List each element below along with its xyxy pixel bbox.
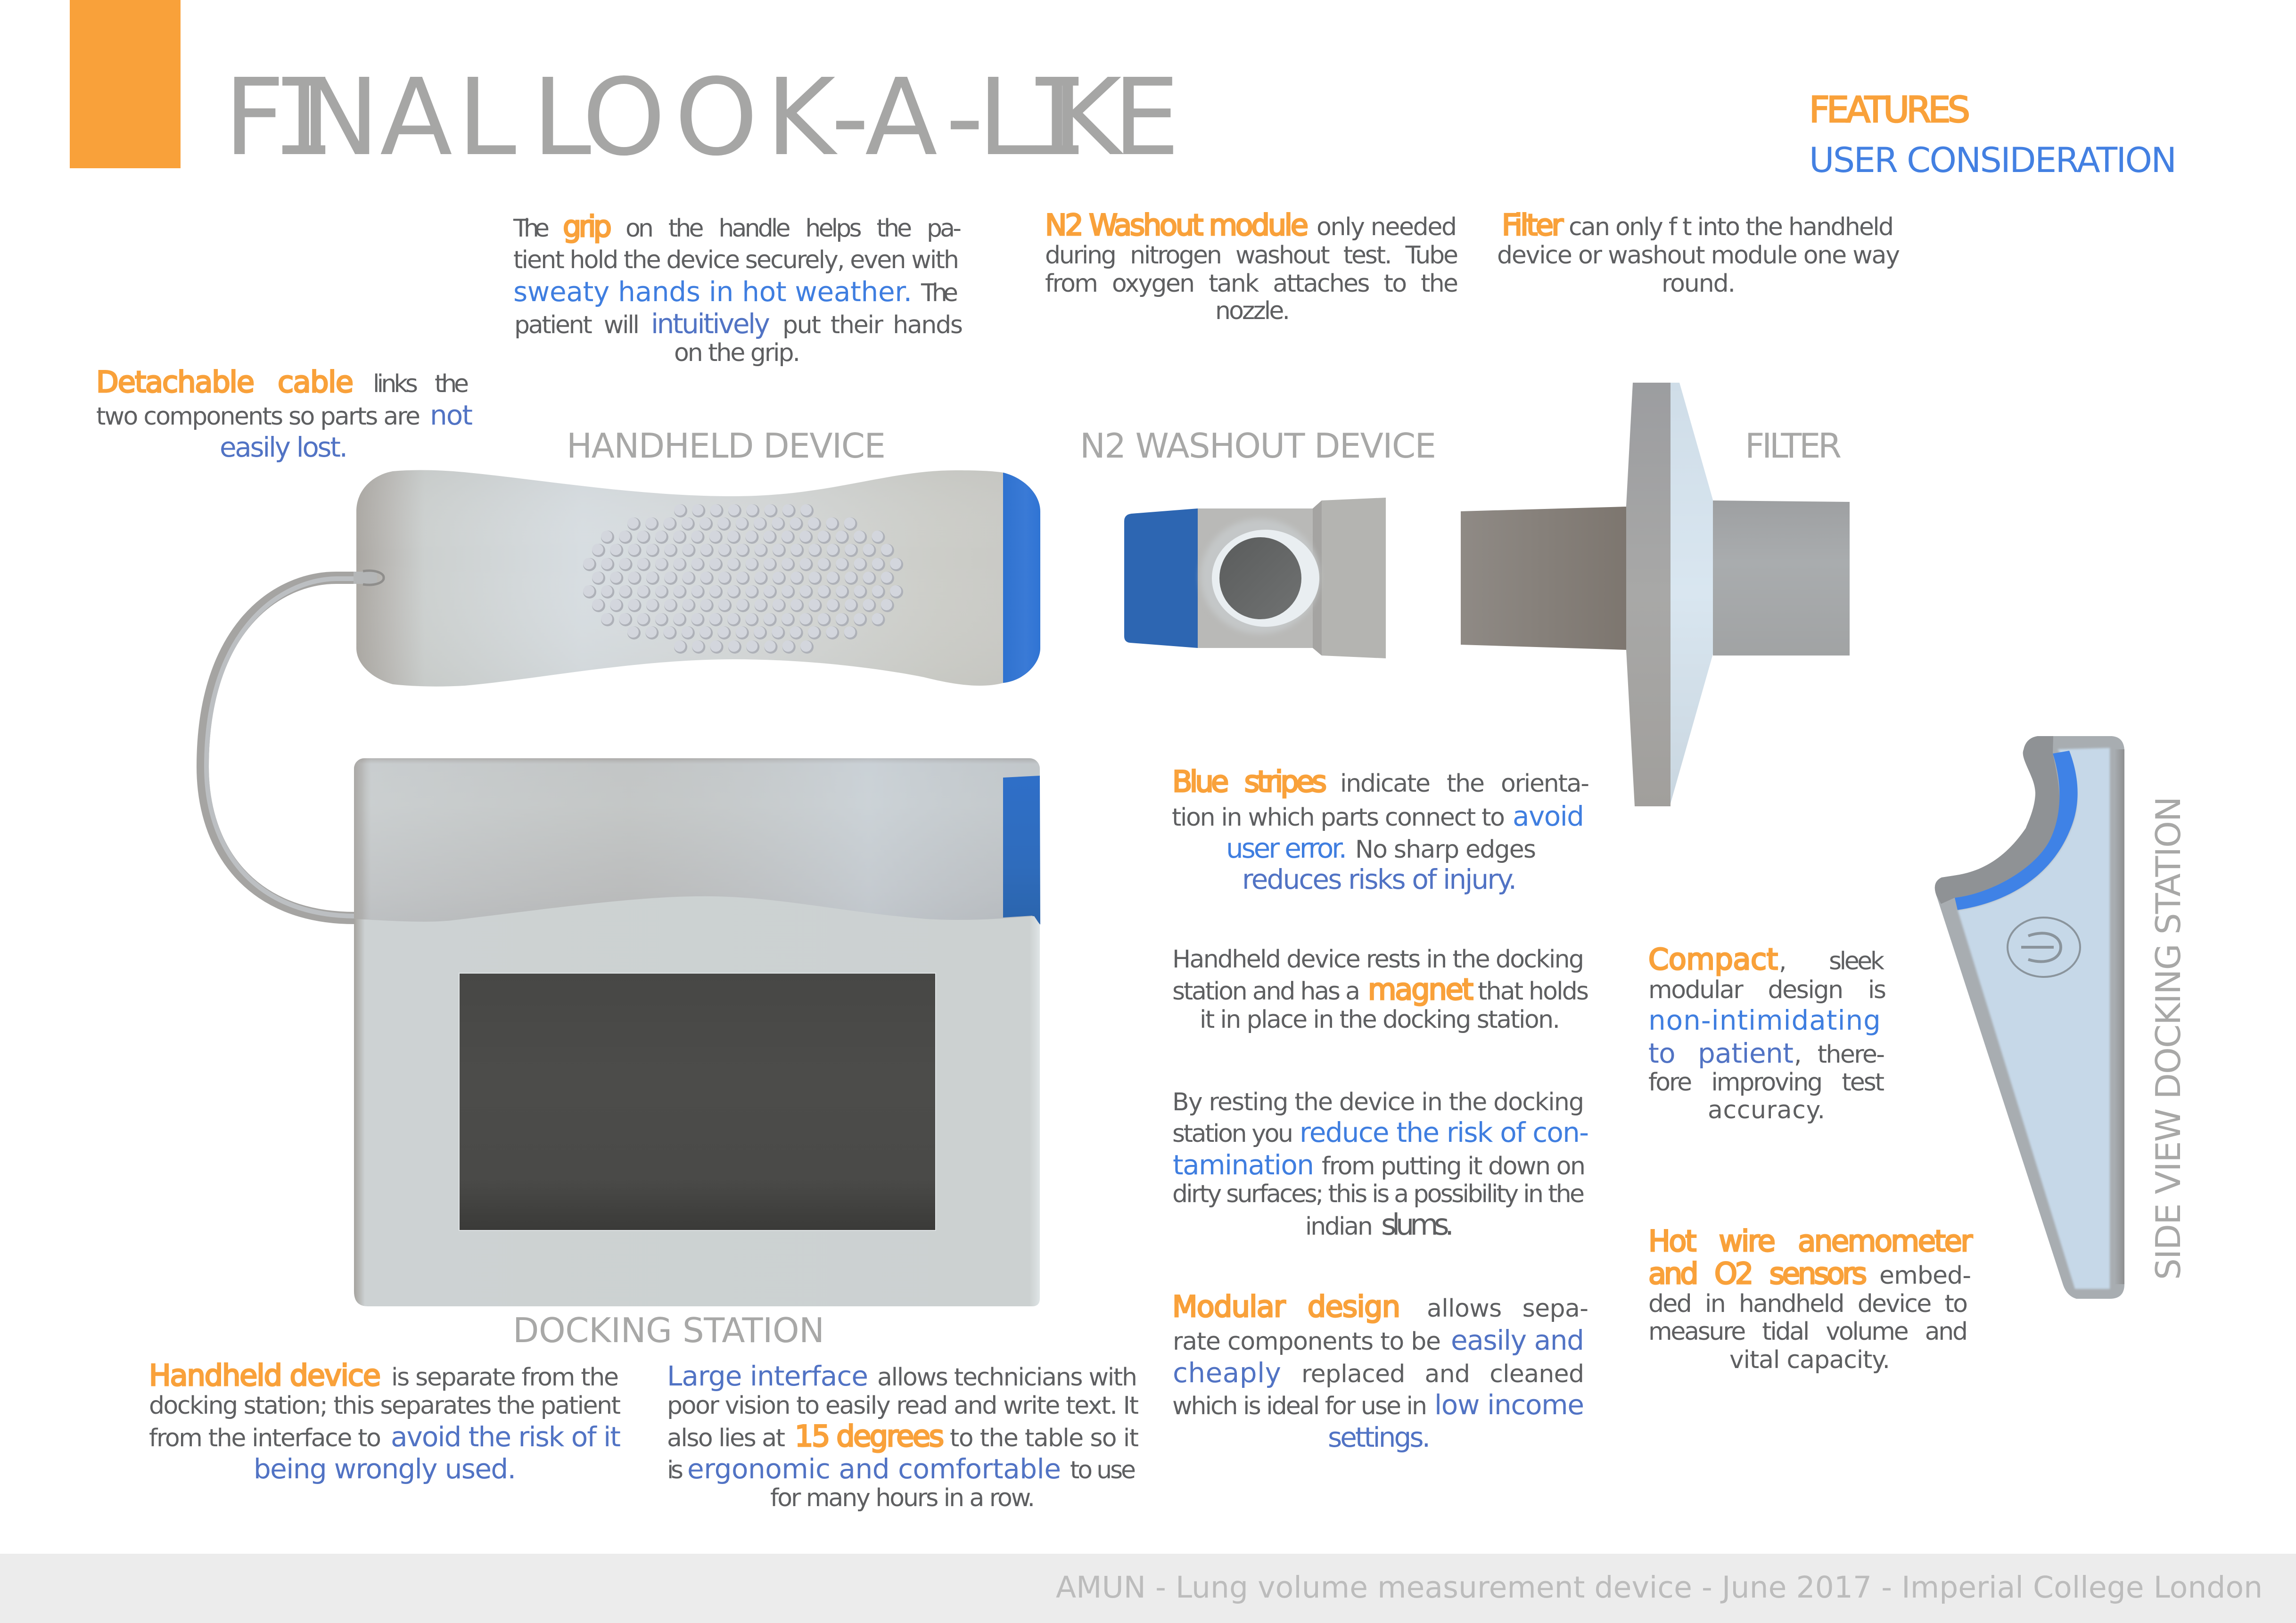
cable socket: [354, 571, 384, 585]
text: contamination: from putting it down on: [1322, 1152, 1586, 1180]
label: side view docking station: SIDE VIEW DOCKING STATION: [2148, 796, 2188, 1280]
text: contamination: [1172, 1088, 1589, 1242]
docking station back: [354, 758, 1040, 947]
text: blue stripes: [1172, 764, 1589, 895]
port: [1201, 519, 1319, 634]
text: grip: on the grip.: [674, 339, 800, 367]
blue stripe: [1003, 467, 1041, 690]
text: filter: Filter: [1502, 208, 1564, 242]
text: grip: The: [921, 279, 958, 307]
text: compact: , there-: [1794, 1041, 1885, 1069]
text: grip: grip: [563, 209, 612, 244]
text: detachable cable: two components so parts are: [96, 402, 420, 431]
text: detachable cable: links: [373, 370, 418, 398]
text: detachable cable: cable: [278, 365, 354, 399]
left tube: [1461, 507, 1626, 650]
washout module: [1124, 498, 1386, 658]
text: hot wire anemometer: ded in handheld device to: [1648, 1290, 1968, 1318]
text: hot wire anemometer: and O2 sensors: [1648, 1256, 1867, 1291]
text: magnet: that holds: [1478, 977, 1589, 1006]
text: blue stripes: No sharp edges: [1355, 836, 1536, 864]
text: modular design: rate components to be: [1173, 1328, 1441, 1356]
text: grip: on the handle helps the pa-: [625, 214, 962, 243]
text: hot wire anemometer: embed-: [1879, 1262, 1971, 1290]
text: grip: intuitively: [651, 308, 770, 340]
text: contamination: By resting the device in the docking: [1172, 1088, 1584, 1116]
blue band: [1955, 751, 2078, 910]
text: modular design: allows sepa-: [1427, 1295, 1588, 1323]
text: magnet: Handheld device rests in the docking: [1172, 945, 1584, 974]
text: contamination: slums.: [1381, 1207, 1454, 1242]
text: n2 washout module: from oxygen tank attaches to the: [1045, 270, 1458, 298]
text: hot wire anemometer: vital capacity.: [1729, 1346, 1890, 1374]
legend: user consideration: USER CONSIDERATION: [1809, 140, 2177, 180]
text: large interface: poor vision to easily read and write text. It: [667, 1392, 1139, 1420]
title: NAL: [300, 56, 552, 180]
screen: [459, 973, 936, 1230]
text: compact: sleek: [1829, 947, 1885, 975]
body: [1198, 508, 1314, 648]
cable: [203, 578, 357, 918]
side view of docking station: [1935, 736, 2124, 1299]
text: handheld device: is separate from the: [391, 1363, 619, 1392]
text: large interface: Large interface: [667, 1360, 868, 1392]
power icon: [2008, 918, 2080, 977]
text: n2 washout module: [1045, 208, 1458, 325]
text: contamination: station you: [1172, 1120, 1293, 1148]
legend: features: FEATURES: [1809, 89, 1970, 131]
text: large interface: is: [667, 1456, 683, 1484]
label: filter: FILTER: [1745, 426, 1842, 466]
text: detachable cable: the: [435, 370, 469, 398]
text: filter: device or washout module one way: [1497, 241, 1900, 270]
text: compact: [1648, 942, 1886, 1124]
text: hot wire anemometer: [1648, 1224, 1973, 1374]
text: grip: patient will: [514, 311, 640, 339]
text: blue stripes: Blue stripes: [1172, 764, 1327, 799]
text: blue stripes: tion in which parts connect to: [1172, 803, 1505, 832]
text: contamination: dirty surfaces; this is a possibility in the: [1172, 1180, 1585, 1208]
legend: [1809, 89, 2177, 180]
text: handheld device: avoid the risk of it: [391, 1421, 621, 1453]
text: filter: round.: [1662, 270, 1736, 298]
text: grip: The: [513, 214, 550, 243]
text: large interface: ergonomic and comfortable: [687, 1453, 1061, 1485]
light face: [1958, 748, 2110, 1289]
text: magnet: it in place in the docking station.: [1200, 1006, 1560, 1034]
text: modular design: cheaply: [1173, 1357, 1281, 1389]
title: I: [272, 56, 336, 180]
collar: [1313, 498, 1386, 658]
text: compact: Compact: [1648, 942, 1778, 976]
text: filter: can only f t into the handheld: [1569, 213, 1894, 241]
outer body: [1935, 736, 2124, 1299]
grip dimples: [589, 510, 903, 647]
cone: [1671, 383, 1713, 803]
text: compact: modular design is: [1648, 976, 1886, 1004]
text: large interface: to the table so it: [950, 1424, 1139, 1452]
text: handheld device: docking station; this separates the patient: [149, 1392, 621, 1420]
text: large interface: allows technicians with: [877, 1363, 1137, 1392]
orange header block: [70, 0, 181, 168]
text: blue stripes: avoid: [1513, 800, 1584, 832]
text: hot wire anemometer: measure tidal volume and: [1648, 1318, 1968, 1346]
text: compact: fore improving test: [1648, 1068, 1885, 1097]
text: magnet: station and has a: [1172, 977, 1360, 1006]
text: large interface: 15 degrees: [795, 1419, 944, 1453]
text: compact: ,: [1779, 947, 1787, 975]
footer band: [0, 1554, 2296, 1623]
text: large interface: [667, 1360, 1139, 1512]
text: contamination: tamination: [1173, 1149, 1314, 1181]
text: detachable cable: [96, 365, 473, 463]
text: grip: put their hands: [782, 311, 963, 339]
text: modular design: [1172, 1289, 1588, 1453]
filter: [1461, 383, 1850, 806]
text: modular design: which is ideal for use in: [1172, 1392, 1427, 1420]
blue end cap: [1124, 508, 1198, 648]
footer text: AMUN - Lung volume measurement device - June 2017 - Imperial College London: [1056, 1570, 2263, 1605]
text: compact: accuracy.: [1708, 1096, 1825, 1124]
text: magnet: magnet: [1368, 972, 1473, 1007]
text: handheld device: from the interface to: [149, 1424, 381, 1452]
text: detachable cable: not: [430, 399, 473, 431]
text: grip: sweaty hands in hot weather.: [513, 276, 912, 308]
text: detachable cable: easily lost.: [220, 431, 348, 463]
title: I: [1025, 56, 1089, 180]
text: large interface: also lies at: [667, 1424, 785, 1452]
text: n2 washout module: N2 Washout module: [1045, 208, 1308, 242]
text: modular design: low income: [1434, 1389, 1584, 1421]
text: large interface: to use: [1070, 1456, 1136, 1484]
text: compact: to patient: [1648, 1037, 1794, 1069]
text: large interface: for many hours in a row.: [770, 1484, 1035, 1512]
text: modular design: Modular design: [1172, 1289, 1400, 1324]
text: contamination: indian: [1305, 1213, 1373, 1241]
text: blue stripes: reduces risks of injury.: [1242, 863, 1517, 895]
text: n2 washout module: nozzle.: [1215, 297, 1290, 325]
disc: [1626, 383, 1671, 806]
text: modular design: easily and: [1451, 1324, 1584, 1356]
text: modular design: settings.: [1328, 1421, 1431, 1453]
text: handheld device: Handheld device: [149, 1358, 381, 1393]
title: LOOK-A-L: [532, 56, 1037, 180]
title: F: [224, 56, 285, 180]
text: modular design: replaced and cleaned: [1301, 1360, 1584, 1388]
text: hot wire anemometer: Hot wire anemometer: [1648, 1224, 1973, 1258]
text: blue stripes: user error.: [1226, 832, 1347, 864]
text: compact: non-intimidating: [1648, 1004, 1881, 1036]
front plate: [354, 896, 1040, 1306]
text: handheld device: [149, 1358, 621, 1485]
handheld device: [354, 467, 1041, 690]
text: filter: [1497, 208, 1900, 298]
label: docking station: DOCKING STATION: [513, 1311, 824, 1350]
text: n2 washout module: only needed: [1317, 213, 1457, 241]
title: KE: [1052, 56, 1180, 180]
label: handheld device: HANDHELD DEVICE: [567, 426, 886, 466]
blue stripe: [1003, 776, 1040, 925]
text: magnet: [1172, 945, 1589, 1034]
right edge shade: [2115, 749, 2124, 1284]
text: blue stripes: indicate the orienta-: [1340, 770, 1589, 798]
text: handheld device: being wrongly used.: [254, 1453, 516, 1485]
label: n2 washout device: N2 WASHOUT DEVICE: [1080, 426, 1436, 466]
text: contamination: reduce the risk of con-: [1300, 1116, 1589, 1148]
right tube: [1713, 500, 1850, 656]
dark notch: [1935, 736, 2059, 904]
text: n2 washout module: during nitrogen washout test. Tube: [1045, 241, 1458, 270]
text: grip: [513, 209, 963, 367]
text: detachable cable: Detachable: [96, 365, 255, 399]
text: grip: tient hold the device securely, even with: [513, 246, 959, 274]
docking station: [354, 758, 1040, 1306]
